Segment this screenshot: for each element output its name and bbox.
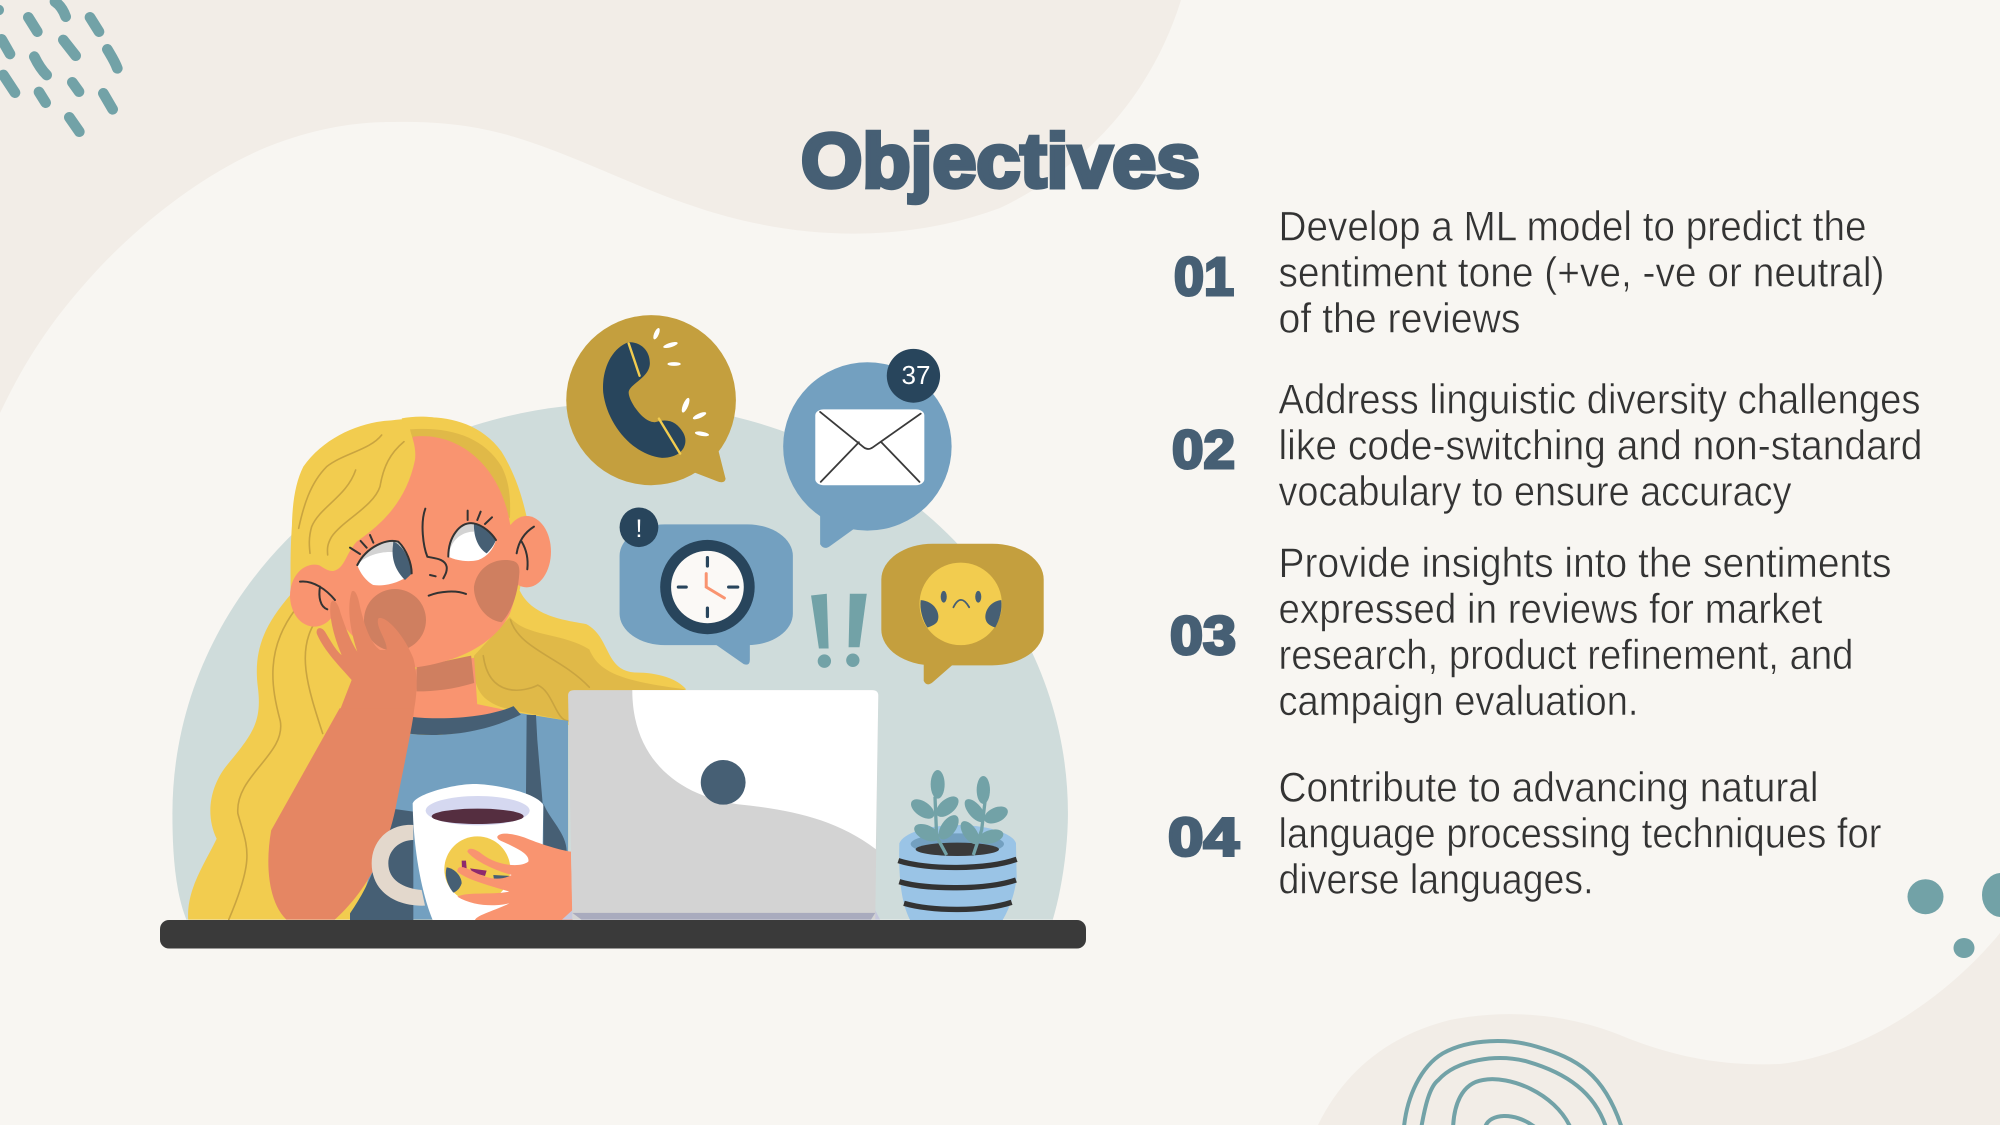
title: Objectives: [801, 119, 1200, 204]
number 04: 04: [1168, 808, 1239, 868]
number 01: 01: [1174, 247, 1234, 307]
text 01: sentiment tone (+ve, -ve or neutral): [1278, 249, 1884, 296]
text 04: language processing techniques for: [1278, 810, 1882, 857]
woman: hair and torso: [188, 417, 686, 920]
woman: head: [290, 417, 551, 667]
text 03: campaign evaluation.: [1278, 677, 1638, 724]
coffee mug and hand: [372, 784, 573, 920]
text 03: expressed in reviews for market: [1278, 585, 1823, 632]
text 04: Contribute to advancing natural: [1278, 764, 1818, 811]
objective 03: [1170, 539, 1892, 724]
speech bubble: email with badge: [783, 349, 952, 548]
text 01: Develop a ML model to predict the: [1278, 203, 1866, 250]
laptop: [562, 690, 880, 920]
illustration: woman at laptop with notifications: [160, 315, 1086, 948]
decoration: teal contour rings: [1404, 1041, 1621, 1125]
woman: arm and hand on cheek: [268, 591, 417, 920]
speech bubble: phone: [566, 315, 736, 485]
exclamation marks: [811, 594, 867, 668]
objective 02: [1172, 376, 1922, 515]
plant in striped pot: [898, 770, 1017, 920]
text 04: [1278, 764, 1882, 903]
text 02: like code-switching and non-standard: [1278, 422, 1922, 469]
number 03: 03: [1170, 606, 1236, 666]
number 02: 02: [1172, 420, 1235, 480]
speech bubble: clock with alert: [620, 508, 793, 665]
text 03: research, product refinement, and: [1278, 631, 1854, 678]
backdrop circle: [172, 403, 1068, 920]
speech bubble: email with badge: 37: [902, 360, 930, 390]
text 01: [1278, 203, 1884, 342]
text 02: vocabulary to ensure accuracy: [1278, 468, 1792, 515]
speech bubble: sad face: [881, 544, 1044, 684]
background blob: top left: [0, 0, 1181, 413]
decoration: teal dots: [1908, 873, 2000, 958]
text 01: of the reviews: [1278, 295, 1520, 342]
background blob: bottom right: [1318, 933, 2000, 1125]
objective 01: [1174, 203, 1884, 342]
text 03: Provide insights into the sentiments: [1278, 539, 1892, 586]
text 02: [1278, 376, 1922, 515]
text 04: diverse languages.: [1278, 856, 1594, 903]
text 03: [1278, 539, 1892, 724]
text 02: Address linguistic diversity challenges: [1278, 376, 1920, 423]
objective 04: [1168, 764, 1882, 903]
woman: lower shirt shadow: [350, 715, 570, 920]
desk: [160, 920, 1086, 948]
speech bubble: clock with alert: !: [636, 515, 642, 543]
decoration: teal dashes: [0, 2, 117, 132]
